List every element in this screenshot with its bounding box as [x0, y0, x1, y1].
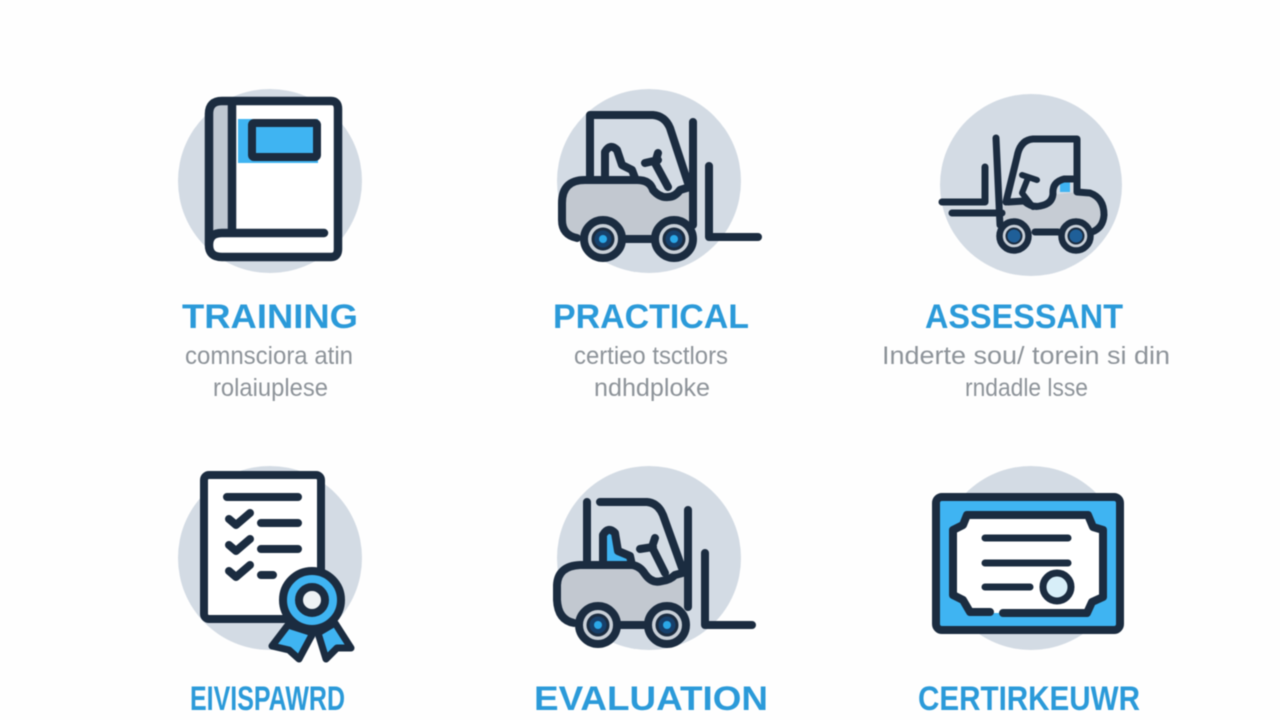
panel: practical [553, 89, 758, 402]
icon: forklift facing right [557, 89, 758, 273]
panel: evaluation [534, 466, 768, 718]
panel: training [178, 89, 362, 402]
heading: award: EIVISPAWRD [190, 680, 345, 718]
panel: assessant [882, 94, 1170, 402]
icon: forklift facing left [940, 94, 1122, 276]
panel: certificate [918, 466, 1140, 718]
text: practical description line 1: certieo tsctlors [574, 342, 728, 370]
icon: checklist with ribbon badge [178, 466, 362, 659]
heading: certificate: CERTIRKEUWR [918, 680, 1140, 718]
heading: assessant: ASSESSANT [925, 298, 1123, 336]
icon: book [178, 89, 362, 273]
icon: certificate [936, 466, 1123, 650]
text: training description line 1: comnsciora atin [185, 342, 353, 370]
heading: practical: PRACTICAL [553, 298, 749, 336]
panel: award [178, 466, 362, 718]
text: assessant description line 1: Inderte sou/ torein si din [882, 342, 1170, 370]
text: training description line 2: rolaiuplese [213, 374, 328, 402]
text: assessant description line 2: rndadle lsse [965, 374, 1088, 402]
icon: forklift with blue seat [557, 466, 752, 650]
heading: evaluation: EVALUATION [534, 680, 768, 718]
text: practical description line 2: ndhdploke [594, 374, 710, 402]
heading: training: TRAINING [182, 298, 358, 336]
